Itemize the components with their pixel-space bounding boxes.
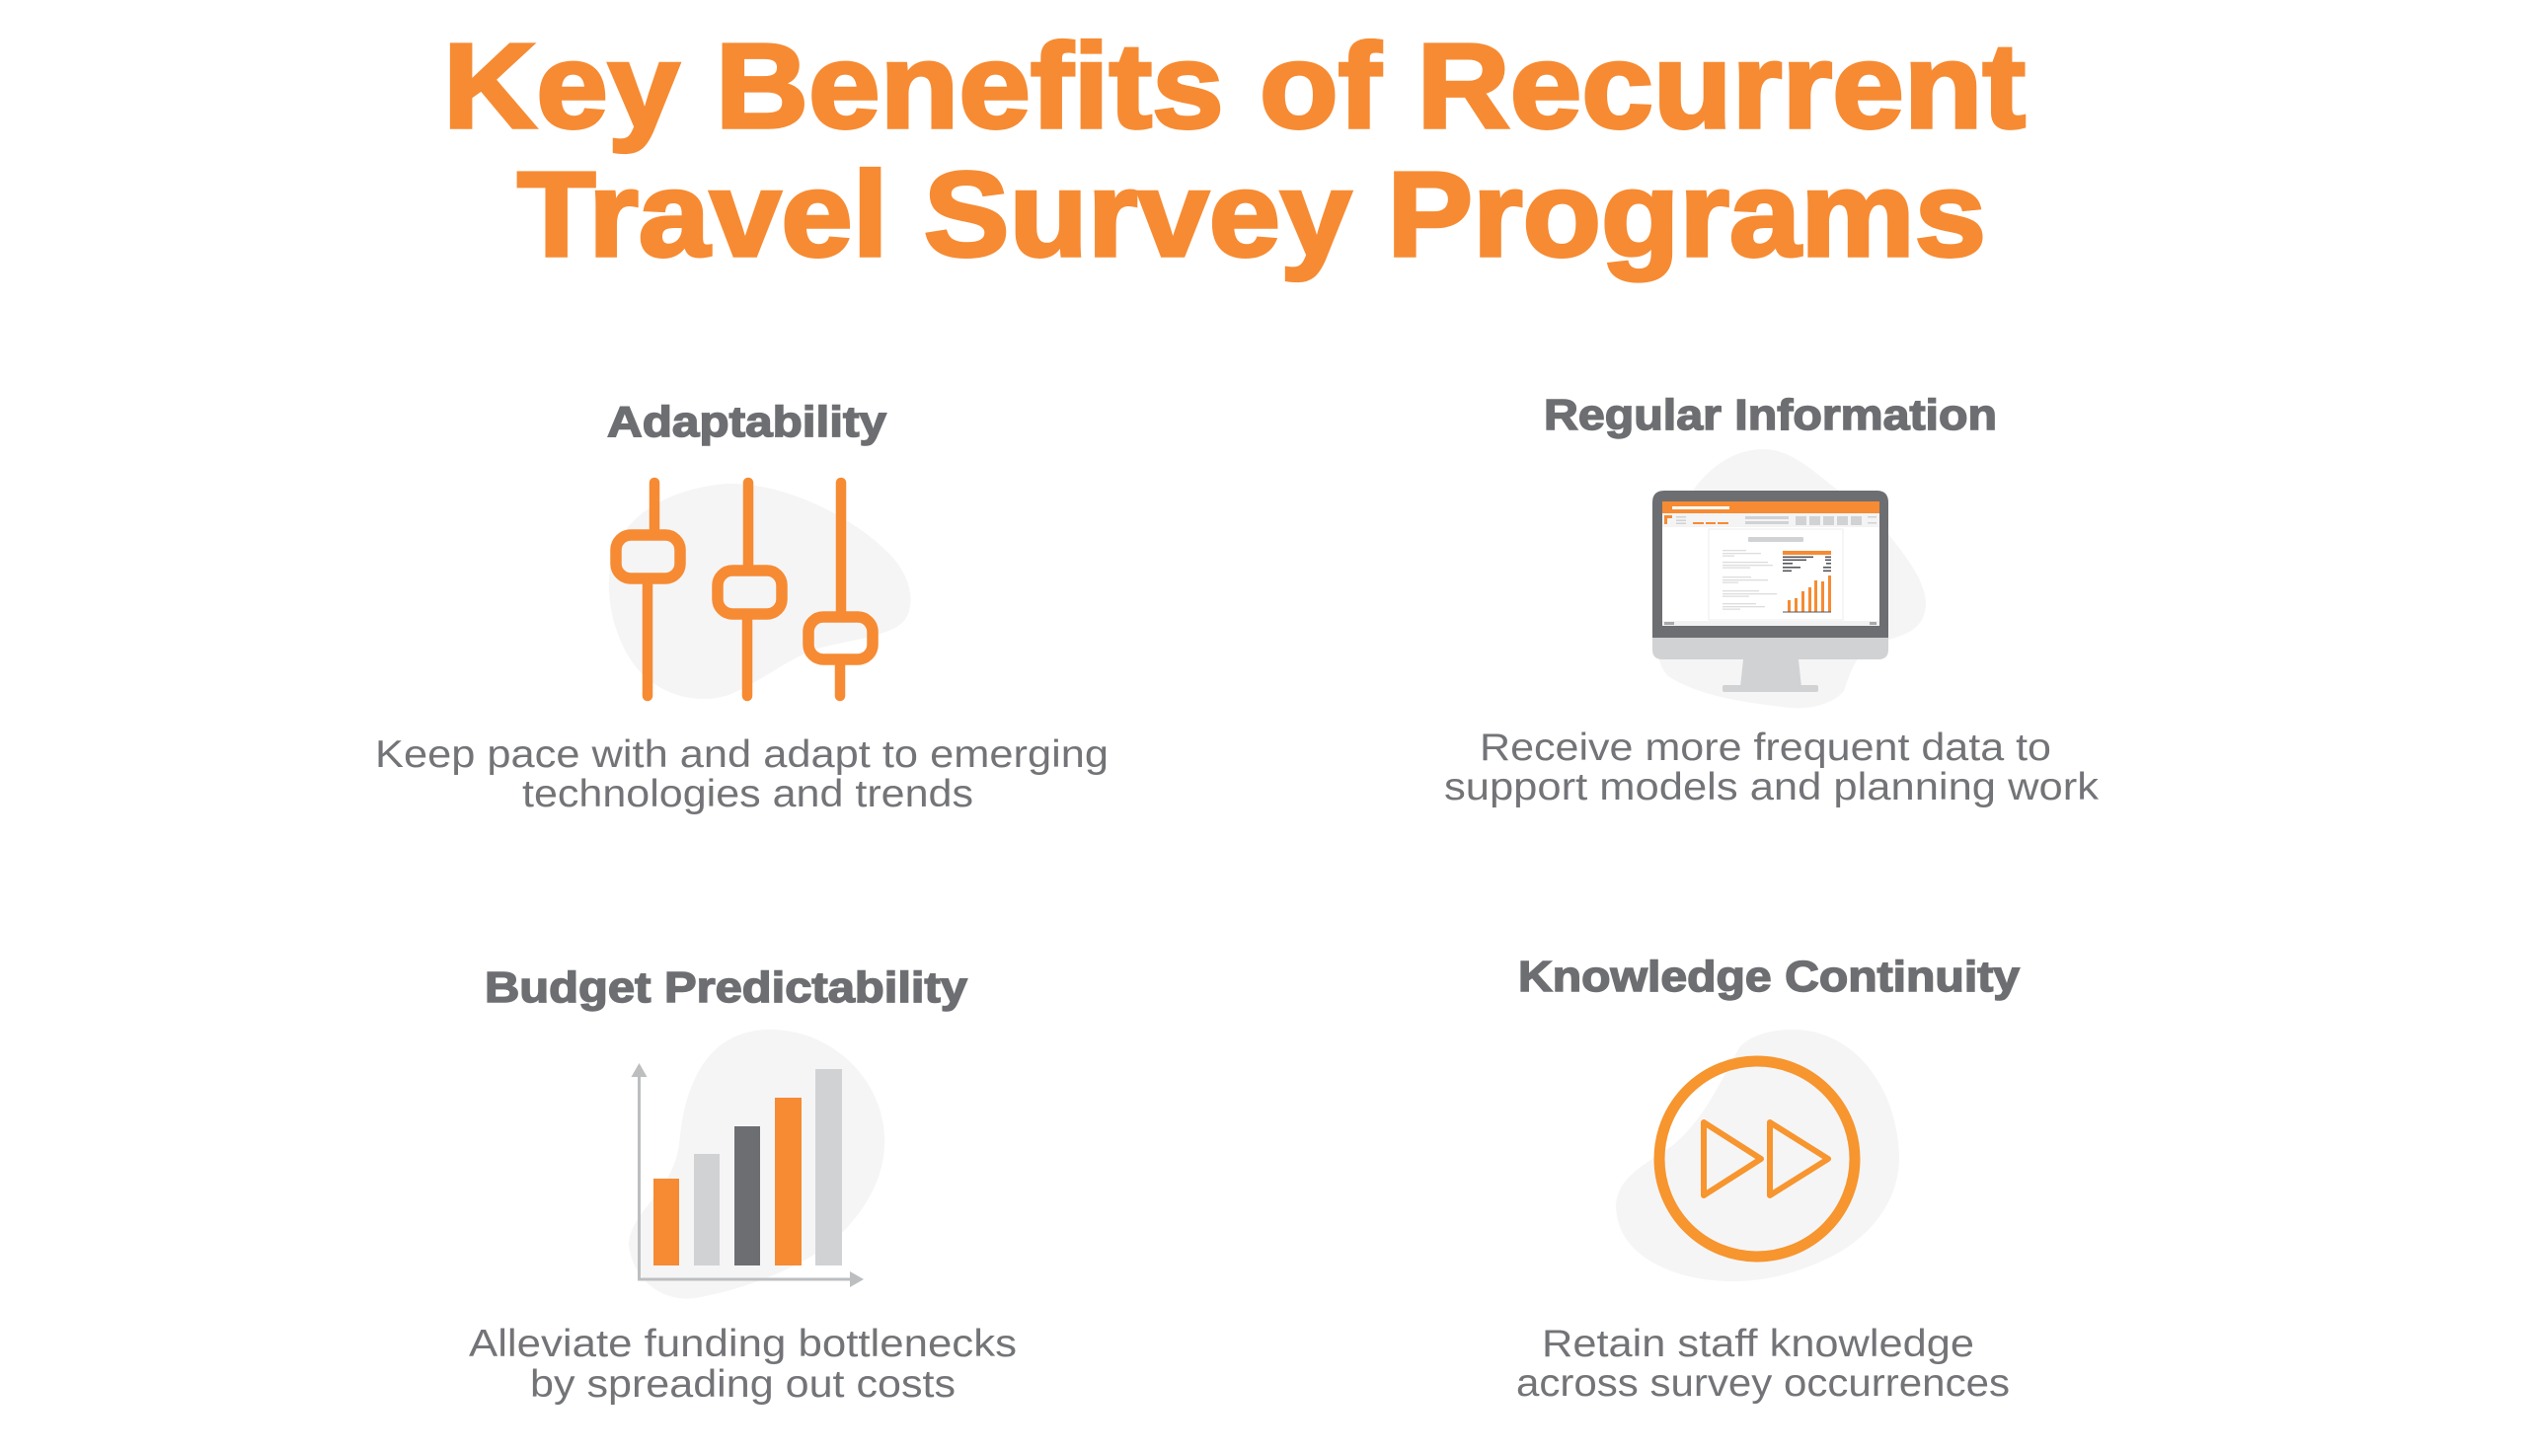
heading: adaptability: Adaptability (607, 398, 887, 446)
panel: adaptability (375, 398, 1109, 815)
description: regular information (1444, 727, 2100, 808)
monitor chin (1652, 638, 1888, 659)
icon: sliders (616, 483, 873, 696)
description: budget predictability: Alleviate funding bottlenecks (469, 1323, 1017, 1365)
title: Key Benefits of Recurrent (443, 19, 2026, 153)
description: knowledge continuity (1516, 1323, 2010, 1405)
panel: budget predictability (469, 963, 1017, 1406)
description: adaptability: Keep pace with and adapt to emerging (375, 733, 1109, 776)
background blob: budget predictability (629, 1030, 884, 1299)
monitor bezel (1652, 491, 1888, 638)
heading: knowledge continuity: Knowledge Continuity (1518, 953, 2021, 1001)
title: Travel Survey Programs (517, 147, 1986, 281)
panel: knowledge continuity (1516, 953, 2021, 1405)
background blob: adaptability (609, 484, 911, 699)
description: adaptability: technologies and trends (522, 773, 973, 815)
description: knowledge continuity: across survey occurrences (1516, 1362, 2010, 1405)
icon: fast forward (1659, 1061, 1855, 1257)
description: adaptability (375, 733, 1109, 815)
description: budget predictability (469, 1323, 1017, 1406)
description: regular information: Receive more frequent data to (1480, 727, 2051, 769)
heading: regular information: Regular Information (1544, 391, 1997, 439)
panel: regular information (1444, 391, 2100, 808)
title (443, 19, 2026, 281)
background blob: regular information (1656, 449, 1926, 708)
chart axes (632, 1063, 864, 1287)
icon: desktop monitor with report (1652, 491, 1888, 692)
description: budget predictability: by spreading out costs (530, 1363, 956, 1406)
chart bars (653, 1069, 842, 1265)
description: knowledge continuity: Retain staff knowledge (1542, 1323, 1974, 1365)
description: regular information: support models and planning work (1444, 766, 2100, 808)
heading: budget predictability: Budget Predictability (485, 963, 968, 1012)
monitor stand (1740, 659, 1801, 687)
screen (1662, 501, 1879, 626)
icon: bar chart (632, 1063, 864, 1287)
background blob: knowledge continuity (1616, 1030, 1899, 1281)
